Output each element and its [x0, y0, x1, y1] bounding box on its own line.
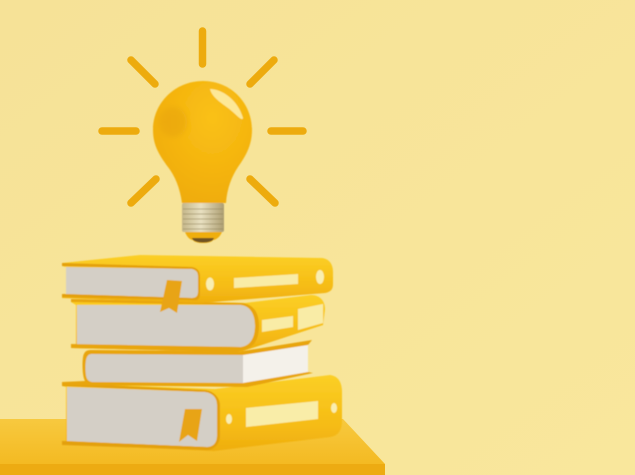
light rays [102, 31, 303, 203]
bulb shading [159, 107, 187, 137]
screw threads [183, 209, 223, 229]
cover edge [62, 263, 200, 300]
cover [62, 340, 313, 387]
page edge [71, 299, 259, 352]
book stack [62, 255, 342, 451]
bulb highlight [210, 89, 243, 119]
book 2 [71, 295, 325, 352]
book 4: bottom [62, 375, 342, 451]
dots [206, 278, 214, 290]
label [234, 274, 298, 288]
dots [226, 414, 232, 424]
cover [71, 295, 325, 352]
top cover and spine [62, 255, 333, 303]
book 1: top [62, 255, 333, 313]
pages [67, 387, 217, 447]
bookmark [160, 280, 182, 313]
bookmark [179, 409, 202, 442]
table [0, 419, 385, 475]
bulb tip [185, 232, 222, 243]
label [246, 401, 318, 427]
pages front [85, 353, 243, 383]
pages [77, 305, 255, 347]
book 3 [62, 340, 313, 387]
labels [262, 316, 293, 332]
bulb glass [153, 81, 252, 203]
light bulb [153, 81, 252, 243]
spine and cover [62, 375, 342, 451]
pages [66, 267, 198, 298]
page edge [62, 383, 220, 450]
screw base [182, 203, 224, 232]
pages side [243, 344, 308, 384]
